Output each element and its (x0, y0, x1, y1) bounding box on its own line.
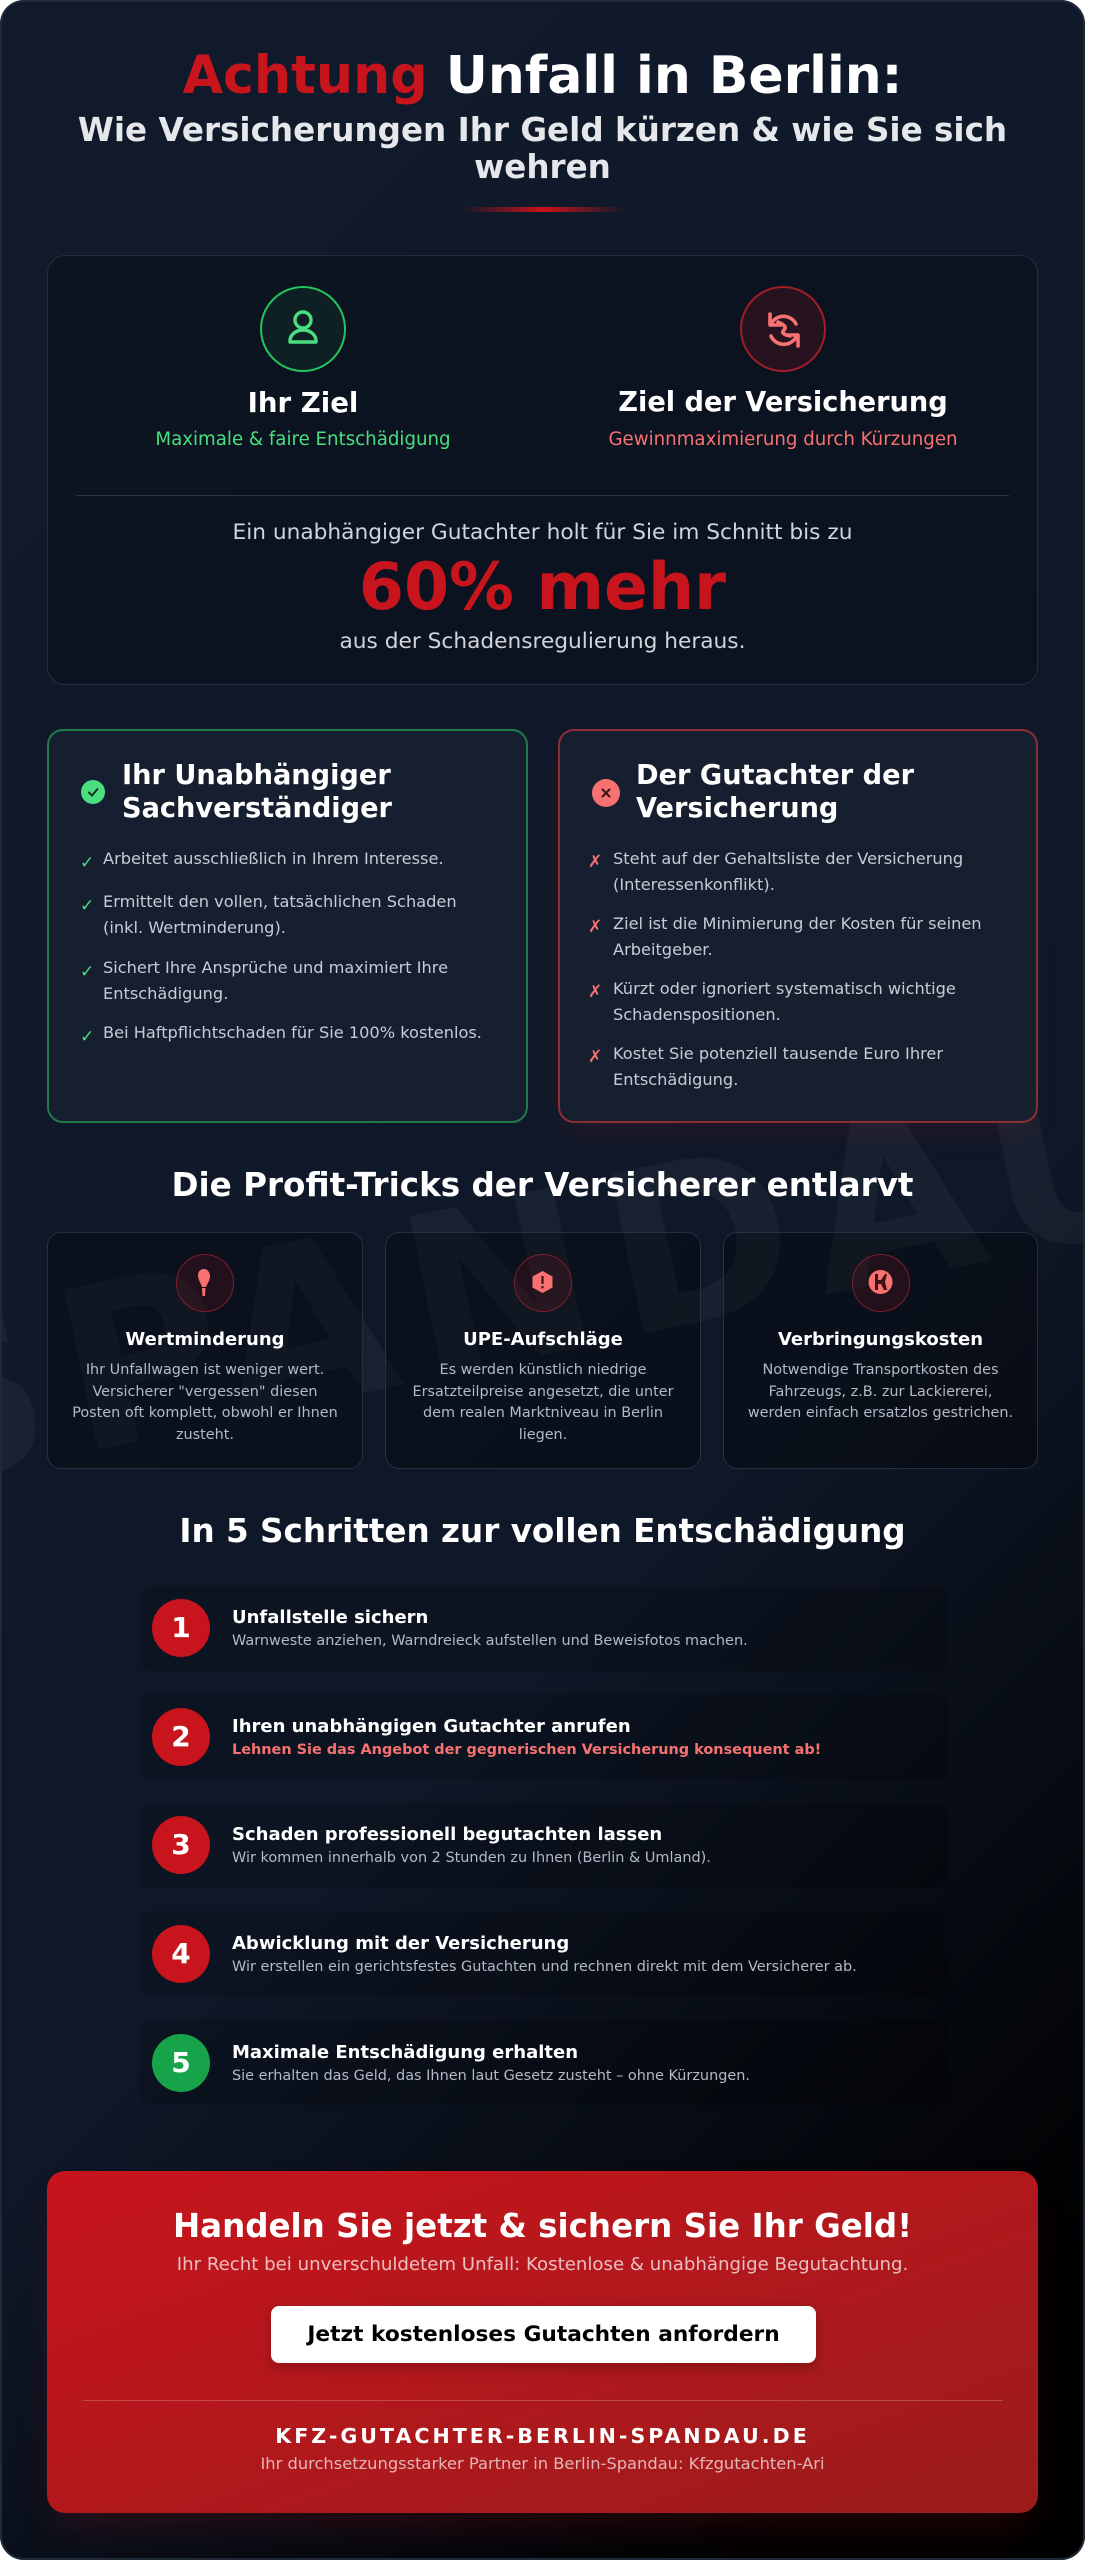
benefits list: ✓ (80, 1027, 94, 1047)
item 3 (80, 958, 448, 1003)
heading: five steps: In 5 Schritten zur vollen Entschädigung (179, 1512, 906, 1550)
icon: UPE (514, 1254, 572, 1312)
heading: Sachverständiger (122, 793, 392, 824)
subtitle (78, 111, 1007, 186)
drawbacks list: ✗ (588, 1047, 602, 1067)
text: UPE: Ersatzteilpreise angesetzt, die unter (412, 1384, 674, 1400)
text: insurer goal: Gewinnmaximierung durch Kürzungen (608, 429, 958, 450)
heading: profit tricks: Die Profit-Tricks der Versicherer entlarvt (171, 1166, 914, 1204)
heading: your goal: Ihr Ziel (248, 386, 358, 419)
item 3: Schadenspositionen. (613, 1005, 781, 1024)
drawbacks list: ✗ (588, 982, 602, 1002)
item 1: (Interessenkonflikt). (613, 875, 775, 894)
text: Wertminderung (72, 1362, 338, 1443)
title: Wertminderung: Wertminderung (125, 1329, 285, 1350)
subtitle: Wie Versicherungen Ihr Geld kürzen & wie Sie sich (78, 111, 1007, 149)
item 2 (588, 914, 982, 959)
step 5 row (139, 2020, 948, 2105)
step 5 number: 5 (171, 2046, 191, 2079)
step 1 number: 1 (171, 1611, 191, 1644)
panel: trick Wertminderung (47, 1232, 363, 1469)
button (271, 2306, 816, 2363)
step 4 title: Abwicklung mit der Versicherung (232, 1933, 569, 1954)
heading (636, 760, 914, 824)
item 3: Kürzt oder ignoriert systematisch wichtige (613, 979, 956, 998)
item 4: Bei Haftpflichtschaden für Sie 100% kostenlos. (103, 1023, 482, 1042)
icon: Verbringung (852, 1254, 910, 1312)
text: UPE: Es werden künstlich niedrige (439, 1362, 647, 1378)
heading: Versicherung (636, 793, 838, 824)
item 2: Ermittelt den vollen, tatsächlichen Schaden (103, 892, 457, 911)
step 3 number (152, 1816, 210, 1874)
item 3: Sichert Ihre Ansprüche und maximiert Ihre (103, 958, 448, 977)
benefits list: ✓ (80, 896, 94, 916)
text: your goal: Maximale & faire Entschädigung (155, 429, 451, 450)
drawbacks list: ✗ (588, 917, 602, 937)
text: Wertminderung: Versicherer "vergessen" diesen (92, 1384, 318, 1400)
tagline: Ihr durchsetzungsstarker Partner in Berlin-Spandau: Kfzgutachten-Ari (260, 2454, 824, 2473)
heading: Der Gutachter der (636, 760, 914, 791)
step 2 title: Ihren unabhängigen Gutachter anrufen (232, 1716, 631, 1737)
step 3 title: Schaden professionell begutachten lassen (232, 1824, 662, 1845)
text: UPE: dem realen Marktniveau in Berlin (423, 1405, 663, 1421)
panel: insurer expert (558, 729, 1038, 1123)
title: Verbringung: Verbringungskosten (778, 1329, 983, 1350)
step 4 number (152, 1925, 210, 1983)
icon: Wertminderung (176, 1254, 234, 1312)
benefits list: ✓ (80, 962, 94, 982)
item 1: Steht auf der Gehaltsliste der Versicherung (613, 849, 963, 868)
benefits list: ✓ (80, 853, 94, 873)
step 3 row (139, 1803, 948, 1888)
panel: trick Verbringung (723, 1232, 1038, 1469)
panel: independent expert (47, 729, 528, 1123)
step 4 row (139, 1911, 948, 1996)
item 3: Entschädigung. (103, 984, 228, 1003)
step 5 text: Sie erhalten das Geld, das Ihnen laut Gesetz zusteht – ohne Kürzungen. (232, 2068, 750, 2084)
step 1 text: Warnweste anziehen, Warndreieck aufstellen und Beweisfotos machen. (232, 1633, 748, 1649)
heading: insurer goal: Ziel der Versicherung (618, 387, 948, 418)
step 3 number: 3 (171, 1828, 191, 1861)
icon: check badge (81, 780, 105, 804)
step 1 number (152, 1599, 210, 1657)
step 2 row (139, 1694, 948, 1779)
item 3 (588, 979, 956, 1024)
step 5 title: Maximale Entschädigung erhalten (232, 2042, 578, 2063)
step 5 number (152, 2034, 210, 2092)
item 2: (inkl. Wertminderung). (103, 918, 286, 937)
icon: cross badge (592, 779, 620, 807)
heading: Ihr Unabhängiger (122, 760, 391, 791)
text: Ihr Recht bei unverschuldetem Unfall: Kostenlose & unabhängige Begutachtung. (177, 2254, 908, 2275)
text: Verbringung (748, 1362, 1013, 1421)
text: intro to figure: Ein unabhängiger Gutachter holt für Sie im Schnitt bis zu (232, 520, 852, 545)
item 4 (588, 1044, 944, 1089)
step 1 row (139, 1586, 948, 1671)
item 2: Arbeitgeber. (613, 940, 713, 959)
icon: person (260, 286, 346, 372)
icon: sync arrows (740, 286, 826, 372)
drawbacks list (588, 849, 982, 1089)
cta divider (83, 2400, 1003, 2401)
item 2: Ziel ist die Minimierung der Kosten für seinen (613, 914, 982, 933)
panel divider (76, 495, 1009, 496)
step 1 title: Unfallstelle sichern (232, 1607, 428, 1628)
step 3 text: Wir kommen innerhalb von 2 Stunden zu Ihnen (Berlin & Umland). (232, 1850, 711, 1866)
step 2 number (152, 1708, 210, 1766)
step 4 number: 4 (171, 1937, 191, 1970)
item 4: Entschädigung. (613, 1070, 738, 1089)
text: UPE (412, 1362, 674, 1443)
step 4 text: Wir erstellen ein gerichtsfestes Gutachten und rechnen direkt mit dem Versicherer ab. (232, 1959, 857, 1975)
panel: call to action (47, 2171, 1038, 2513)
panel: trick UPE (385, 1232, 701, 1469)
text: after figure: aus der Schadensregulierung heraus. (339, 629, 746, 654)
benefits list (80, 849, 482, 1047)
title: Achtung Unfall in Berlin: (183, 46, 902, 106)
panel: goals and headline figure (47, 255, 1038, 685)
title: UPE: UPE-Aufschläge (463, 1329, 623, 1350)
item 1: Arbeitet ausschließlich in Ihrem Interesse. (103, 849, 444, 868)
drawbacks list: ✗ (588, 852, 602, 872)
text: UPE: liegen. (519, 1427, 567, 1443)
heading: Handeln Sie jetzt & sichern Sie Ihr Geld! (173, 2207, 912, 2245)
heading (122, 760, 392, 824)
text: Wertminderung: Posten oft komplett, obwohl er Ihnen (72, 1405, 338, 1421)
step 2 text: Lehnen Sie das Angebot der gegnerischen Versicherung konsequent ab! (232, 1742, 821, 1758)
step 2 number: 2 (171, 1720, 191, 1753)
title divider (461, 207, 625, 212)
button: Jetzt kostenloses Gutachten anfordern (307, 2322, 780, 2347)
item 1 (588, 849, 963, 894)
text: Wertminderung: Ihr Unfallwagen ist weniger wert. (86, 1362, 324, 1378)
figure: 60% mehr: 60% mehr (359, 550, 726, 625)
text: Verbringung: Fahrzeugs, z.B. zur Lackiererei, (769, 1384, 992, 1400)
item 4: Kostet Sie potenziell tausende Euro Ihrer (613, 1044, 943, 1063)
subtitle: wehren (474, 148, 611, 186)
text: Verbringung: werden einfach ersatzlos gestrichen. (748, 1405, 1013, 1421)
item 2 (80, 892, 457, 937)
text: Verbringung: Notwendige Transportkosten des (762, 1362, 998, 1378)
text: Wertminderung: zusteht. (176, 1427, 234, 1443)
domain: KFZ-GUTACHTER-BERLIN-SPANDAU.DE (275, 2424, 810, 2448)
